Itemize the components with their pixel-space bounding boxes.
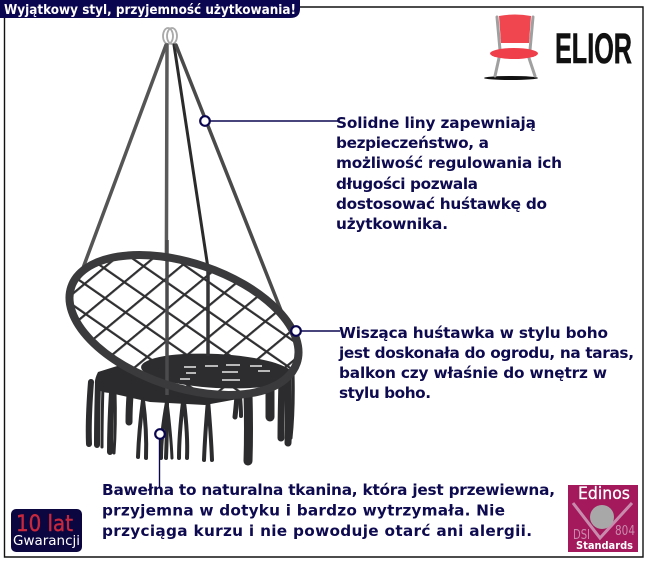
text: ropes description: użytkownika. — [336, 215, 448, 233]
badge: Edinos standards: Edinos — [578, 484, 630, 504]
text: boho description: jest doskonała do ogrodu, na taras, — [338, 344, 634, 362]
hanging chair illustration — [65, 27, 302, 466]
seat — [140, 350, 294, 392]
badge: Edinos standards — [568, 484, 638, 552]
rim — [51, 228, 317, 422]
net backrest — [74, 259, 294, 391]
text: ropes description: bezpieczeństwo, a — [336, 134, 489, 152]
tassels — [89, 372, 293, 461]
badge: 10 years warranty: 10 lat — [16, 512, 73, 537]
icon: red chair — [484, 14, 538, 80]
text: cotton description: przyjemna w dotyku i bardzo wytrzymała. Nie — [102, 502, 505, 520]
title banner: Wyjątkowy styl, przyjemność użytkowania! — [4, 3, 296, 18]
front ropes over net — [167, 240, 208, 395]
logo: Elior — [484, 14, 632, 80]
text: cotton description: Bawełna to naturalna tkanina, która jest przewiewna, — [102, 481, 555, 499]
text: cotton description — [102, 481, 555, 540]
hanging ring — [163, 28, 177, 44]
badge: 10 years warranty: Gwarancji — [13, 534, 80, 549]
text: cotton description: przyciąga kurzu i nie powoduje otarć ani alergii. — [102, 522, 532, 540]
badge: Edinos standards: DSI — [573, 528, 590, 543]
text: ropes description: Solidne liny zapewniają — [336, 114, 536, 132]
text: ropes description: możliwość regulowania ich — [336, 154, 562, 172]
text: boho description: stylu boho. — [339, 384, 431, 402]
text: ropes description: dostosować huśtawkę do — [336, 195, 547, 213]
badge: Edinos standards: Standards — [576, 539, 633, 552]
text: ropes description: długości pozwala — [336, 175, 478, 193]
text: boho description — [338, 324, 634, 402]
text: boho description: balkon czy właśnie do wnętrz w — [339, 364, 607, 382]
callout: boho — [291, 326, 340, 336]
lower seat mass — [95, 340, 285, 405]
text: boho description: Wisząca huśtawka w stylu boho — [339, 324, 608, 342]
text: ropes description — [336, 114, 562, 233]
badge: Edinos standards: 804 — [615, 524, 635, 539]
callout: ropes — [200, 116, 338, 126]
callout: cotton — [155, 429, 165, 488]
ropes — [83, 45, 284, 400]
badge: 10 years warranty — [11, 509, 82, 552]
